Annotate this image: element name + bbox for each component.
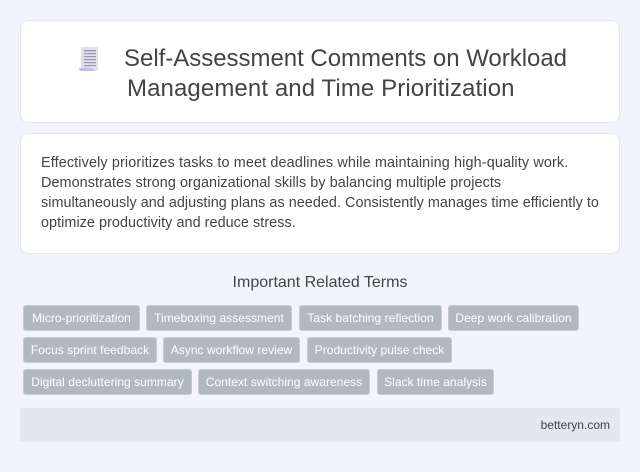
tag: Deep work calibration [455, 311, 572, 325]
tag [307, 337, 452, 363]
tag: Micro-prioritization [32, 311, 131, 325]
heading [124, 45, 567, 102]
tag [299, 305, 442, 331]
tag: Async workflow review [171, 343, 292, 357]
tag: Task batching reflection [307, 311, 434, 325]
footer bar [20, 408, 620, 442]
description text: optimize productivity and reduce stress. [41, 215, 296, 231]
description text: simultaneously and adjusting plans as needed. Consistently manages time efficiently to [41, 195, 599, 211]
panel: title card [20, 20, 620, 123]
tag [146, 305, 292, 331]
heading: Management and Time Prioritization [127, 75, 515, 102]
tag [23, 337, 157, 363]
description text: Effectively prioritizes tasks to meet deadlines while maintaining high-quality work. [41, 155, 568, 171]
tag: Slack time analysis [384, 375, 487, 389]
section heading: Important Related Terms [233, 274, 407, 291]
tag: Digital decluttering summary [31, 375, 184, 389]
panel: description card [20, 133, 620, 254]
description text [41, 155, 599, 231]
description text: Demonstrates strong organizational skills by balancing multiple projects [41, 175, 501, 191]
heading: Self-Assessment Comments on Workload [124, 45, 567, 72]
footer credit: betteryn.com [541, 418, 610, 432]
tag: Context switching awareness [206, 375, 362, 389]
tag [448, 305, 579, 331]
tag list [23, 305, 579, 395]
tag [23, 369, 192, 395]
tag: Focus sprint feedback [31, 343, 149, 357]
tag: Timeboxing assessment [154, 311, 284, 325]
tag [198, 369, 370, 395]
icon: document scroll [79, 47, 98, 71]
tag [23, 305, 140, 331]
tag: Productivity pulse check [315, 343, 444, 357]
tag [377, 369, 494, 395]
tag [163, 337, 300, 363]
